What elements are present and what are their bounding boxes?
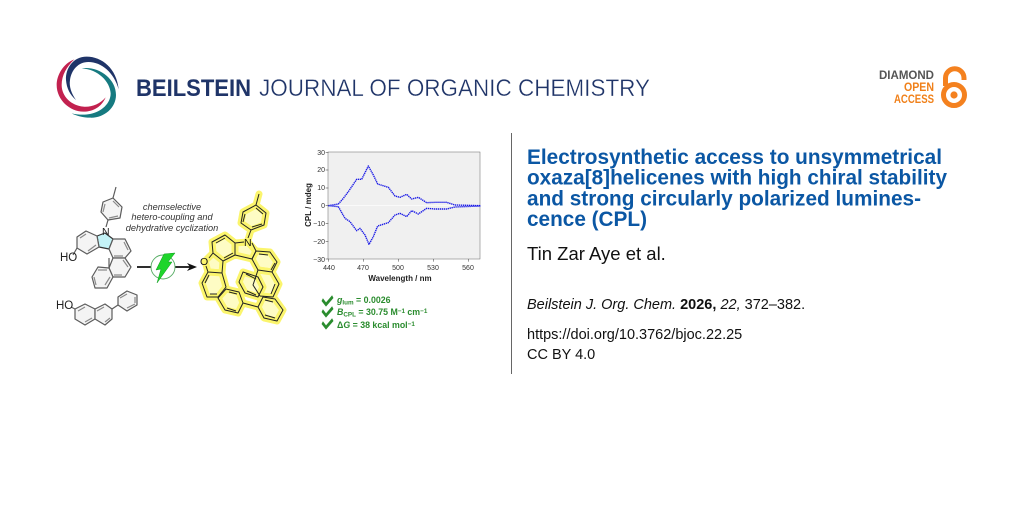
results list with check marks: lum (342, 300, 354, 306)
results list with check marks: g (336, 295, 343, 305)
journal logo swirl (57, 57, 119, 118)
diamond open access label (879, 70, 934, 106)
reactant: carbazole helicene precursor (60, 187, 131, 288)
reaction arrow with electricity icon (137, 253, 197, 283)
results list with check marks: ΔG = 38 kcal mol (337, 320, 408, 330)
DOI: https://doi.org/10.3762/bjoc.22.25 (527, 327, 742, 343)
y axis title: CPL / mdeg (304, 183, 313, 227)
results list with check marks: cm (405, 307, 420, 317)
journal name: JOURNAL OF ORGANIC CHEMISTRY (259, 75, 650, 102)
article title: oxaza[8]helicenes with high chiral stability (527, 167, 947, 190)
authors: Tin Zar Aye et al. (527, 243, 666, 264)
y axis labels: −30 (313, 257, 325, 264)
y axis labels: 0 (321, 203, 325, 210)
x axis labels: 470 (357, 265, 369, 272)
icon: open access padlock (944, 69, 964, 106)
article title: and strong circularly polarized lumines- (527, 187, 921, 210)
x axis labels (323, 265, 474, 272)
y axis labels: 10 (317, 185, 325, 192)
article title: Electrosynthetic access to unsymmetrical (527, 146, 942, 169)
reactant: phenyl naphthol: HO (56, 300, 73, 312)
results list with check marks: = 30.75 M (356, 307, 398, 317)
y axis labels: −20 (313, 239, 325, 246)
reaction condition text: hetero-coupling and (131, 212, 213, 222)
results list with check marks: = 0.0026 (354, 295, 391, 305)
y axis labels: −10 (313, 221, 325, 228)
journal name: BEILSTEIN (136, 75, 251, 102)
reaction condition text: dehydrative cyclization (126, 223, 218, 233)
results list with check marks: −1 (420, 308, 428, 315)
article title: cence (CPL) (527, 208, 647, 231)
results list with check marks: −1 (398, 308, 405, 315)
results list with check marks: B (337, 307, 344, 317)
x axis title: Wavelength / nm (368, 274, 432, 283)
reaction condition text (126, 202, 218, 233)
x axis labels: 440 (323, 265, 335, 272)
x axis labels: 500 (392, 265, 404, 272)
CPL spectrum chart (304, 150, 480, 283)
reactant: phenyl naphthol (56, 291, 137, 325)
plot area (328, 152, 480, 259)
citation: Beilstein J. Org. Chem. 2026, 22, 372–382. (527, 297, 805, 313)
results list with check marks (322, 295, 428, 330)
y axis labels: 30 (317, 150, 325, 157)
diamond open access label: OPEN (904, 82, 934, 94)
license: CC BY 4.0 (527, 347, 595, 363)
y axis labels (313, 150, 325, 264)
vertical divider (511, 133, 512, 374)
y axis labels: 20 (317, 167, 325, 174)
x axis labels: 530 (427, 265, 439, 272)
diamond open access label: DIAMOND (879, 70, 934, 82)
reaction condition text: chemselective (143, 202, 201, 212)
reactant: carbazole helicene precursor: N (102, 226, 110, 238)
x axis labels: 560 (462, 265, 474, 272)
article title (527, 146, 947, 231)
product: oxaza[8]helicene with yellow highlight: O (200, 256, 208, 268)
diamond open access label: ACCESS (894, 94, 934, 106)
reactant: carbazole helicene precursor: HO (60, 252, 77, 264)
product: oxaza[8]helicene with yellow highlight (200, 194, 283, 321)
results list with check marks: −1 (408, 321, 415, 328)
product: oxaza[8]helicene with yellow highlight: N (244, 237, 252, 249)
results list with check marks: CPL (343, 312, 356, 318)
